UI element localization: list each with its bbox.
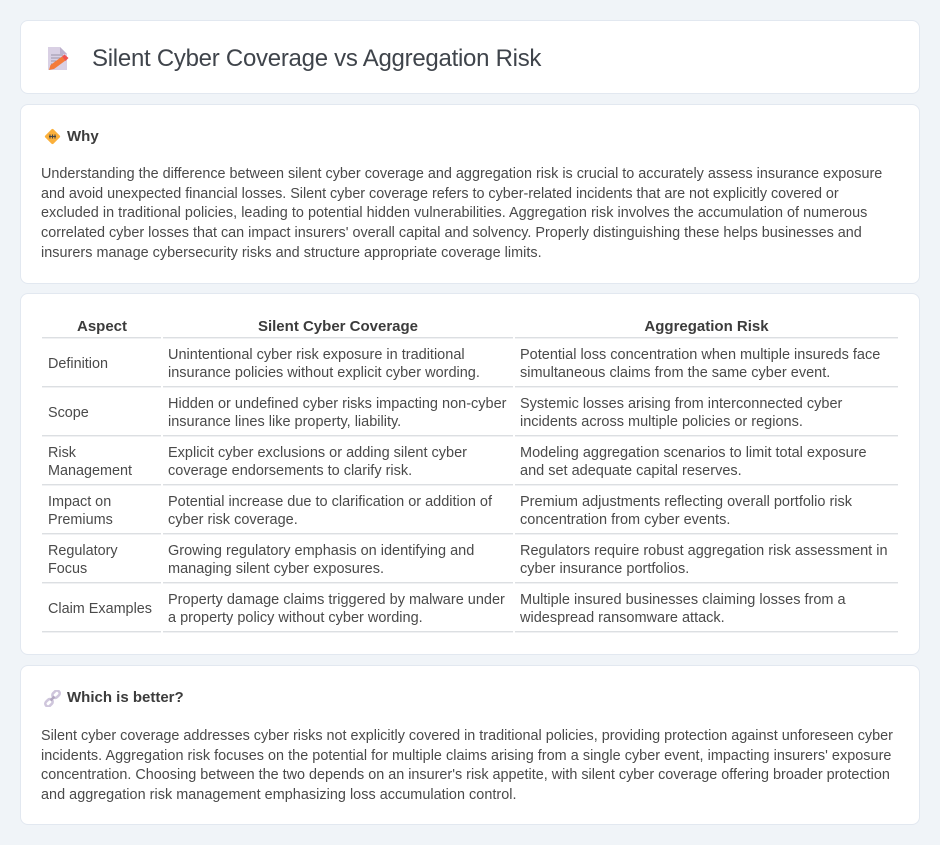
column header: aspect: Aspect	[77, 318, 127, 335]
cell: scope aggregation	[520, 396, 842, 430]
cell: risk management silent: Explicit cyber exclusions or adding silent cyber	[168, 445, 467, 461]
icon: document with pencil	[48, 47, 68, 70]
cell: regulatory aggregation: cyber insurance portfolios.	[520, 561, 689, 577]
cell: premiums silent	[168, 494, 492, 528]
row label: impact on premiums: Premiums	[48, 512, 113, 528]
cell: premiums aggregation: concentration from cyber events.	[520, 512, 730, 528]
cell: premiums silent: cyber risk coverage.	[168, 512, 298, 528]
column header: aggregation risk: Aggregation Risk	[644, 318, 769, 335]
cell: regulatory silent	[168, 543, 474, 577]
cell: claims aggregation	[520, 592, 846, 626]
row label: definition: Definition	[48, 356, 108, 372]
cell: scope aggregation: incidents across multiple policies or regions.	[520, 414, 803, 430]
heading: why: Why	[67, 128, 99, 145]
cell: scope silent	[168, 396, 507, 430]
title: Silent Cyber Coverage vs Aggregation Risk	[92, 45, 541, 72]
cell: definition silent: Unintentional cyber risk exposure in traditional	[168, 347, 465, 363]
row label: risk management: Management	[48, 463, 132, 479]
text block: why paragraph: insurers manage cybersecurity risks and structure appropriate coverage limits.	[41, 245, 542, 261]
cell: premiums aggregation: Premium adjustments reflecting overall portfolio risk	[520, 494, 852, 510]
text block: which is better paragraph: Silent cyber coverage addresses cyber risks not explicitly covered in traditional policies, providing protection against unforeseen cyber	[41, 728, 893, 744]
row label: risk management	[48, 445, 132, 479]
row label: claim examples: Claim Examples	[48, 601, 152, 617]
text block: why paragraph: and avoid unexpected financial losses. Silent cyber coverage refers to cyber-related incidents that are not explicitly covered or	[41, 186, 839, 202]
cell: risk management silent	[168, 445, 467, 479]
cell: premiums silent: Potential increase due to clarification or addition of	[168, 494, 492, 510]
cell: regulatory aggregation: Regulators require robust aggregation risk assessment in	[520, 543, 888, 559]
cell: scope silent: insurance lines like property, liability.	[168, 414, 401, 430]
cell: definition aggregation: Potential loss concentration when multiple insureds face	[520, 347, 880, 363]
cell: definition aggregation	[520, 347, 880, 381]
text block: which is better paragraph	[41, 728, 893, 803]
cell: claims silent: Property damage claims triggered by malware under	[168, 592, 505, 608]
row label: regulatory focus	[48, 543, 118, 577]
panel: which is better card	[20, 665, 920, 825]
text block: why paragraph: correlated cyber losses that can impact insurers' overall capital and solvency. Properly distinguishing these helps businesses and	[41, 225, 862, 241]
cell: risk management aggregation: Modeling aggregation scenarios to limit total exposure	[520, 445, 867, 461]
cell: scope aggregation: Systemic losses arising from interconnected cyber	[520, 396, 842, 412]
comparison table	[42, 318, 898, 633]
cell: definition aggregation: simultaneous claims from the same cyber event.	[520, 365, 830, 381]
cell: claims aggregation: widespread ransomware attack.	[520, 610, 725, 626]
cell: regulatory silent: Growing regulatory emphasis on identifying and	[168, 543, 474, 559]
text block: which is better paragraph: concentration. Choosing between the two depends on an insurer's risk appetite, with silent cyber coverage offering broader protection	[41, 767, 890, 783]
row label: scope: Scope	[48, 405, 89, 421]
cell: premiums aggregation	[520, 494, 852, 528]
text block: which is better paragraph: and aggregation risk management emphasizing loss accumulation control.	[41, 787, 517, 803]
cell: regulatory silent: managing silent cyber exposures.	[168, 561, 384, 577]
cell: definition silent	[168, 347, 480, 381]
cell: claims aggregation: Multiple insured businesses claiming losses from a	[520, 592, 846, 608]
text block: why paragraph: excluded in traditional policies, leading to potential hidden vulnerabilities. Aggregation risk involves the accumulation of numerous	[41, 205, 867, 221]
cell: regulatory aggregation	[520, 543, 888, 577]
row label: impact on premiums	[48, 494, 113, 528]
row label: regulatory focus: Focus	[48, 561, 87, 577]
panel: comparison table card	[20, 293, 920, 655]
cell: risk management aggregation	[520, 445, 867, 479]
column header: silent cyber coverage: Silent Cyber Coverage	[258, 318, 418, 335]
cell: risk management silent: coverage endorsements to clarify risk.	[168, 463, 412, 479]
row label: risk management: Risk	[48, 445, 76, 461]
cell: scope silent: Hidden or undefined cyber risks impacting non-cyber	[168, 396, 507, 412]
panel: why card	[20, 104, 920, 284]
row label: regulatory focus: Regulatory	[48, 543, 118, 559]
text block: which is better paragraph: incidents. Aggregation risk focuses on the potential for multiple claims arising from a single cyber event, impacting insurers' exposure	[41, 748, 891, 764]
cell: definition silent: insurance policies without explicit cyber wording.	[168, 365, 480, 381]
icon: warning diamond	[44, 128, 60, 144]
cell: risk management aggregation: and set adequate capital reserves.	[520, 463, 742, 479]
cell: claims silent	[168, 592, 505, 626]
text block: why paragraph	[41, 166, 882, 261]
panel: title card	[20, 20, 920, 94]
cell: claims silent: a property policy without cyber wording.	[168, 610, 423, 626]
row label: impact on premiums: Impact on	[48, 494, 111, 510]
heading: which is better: Which is better?	[67, 689, 184, 706]
text block: why paragraph: Understanding the difference between silent cyber coverage and aggregation risk is crucial to accurately assess insurance exposure	[41, 166, 882, 182]
icon: chain link	[44, 690, 61, 707]
